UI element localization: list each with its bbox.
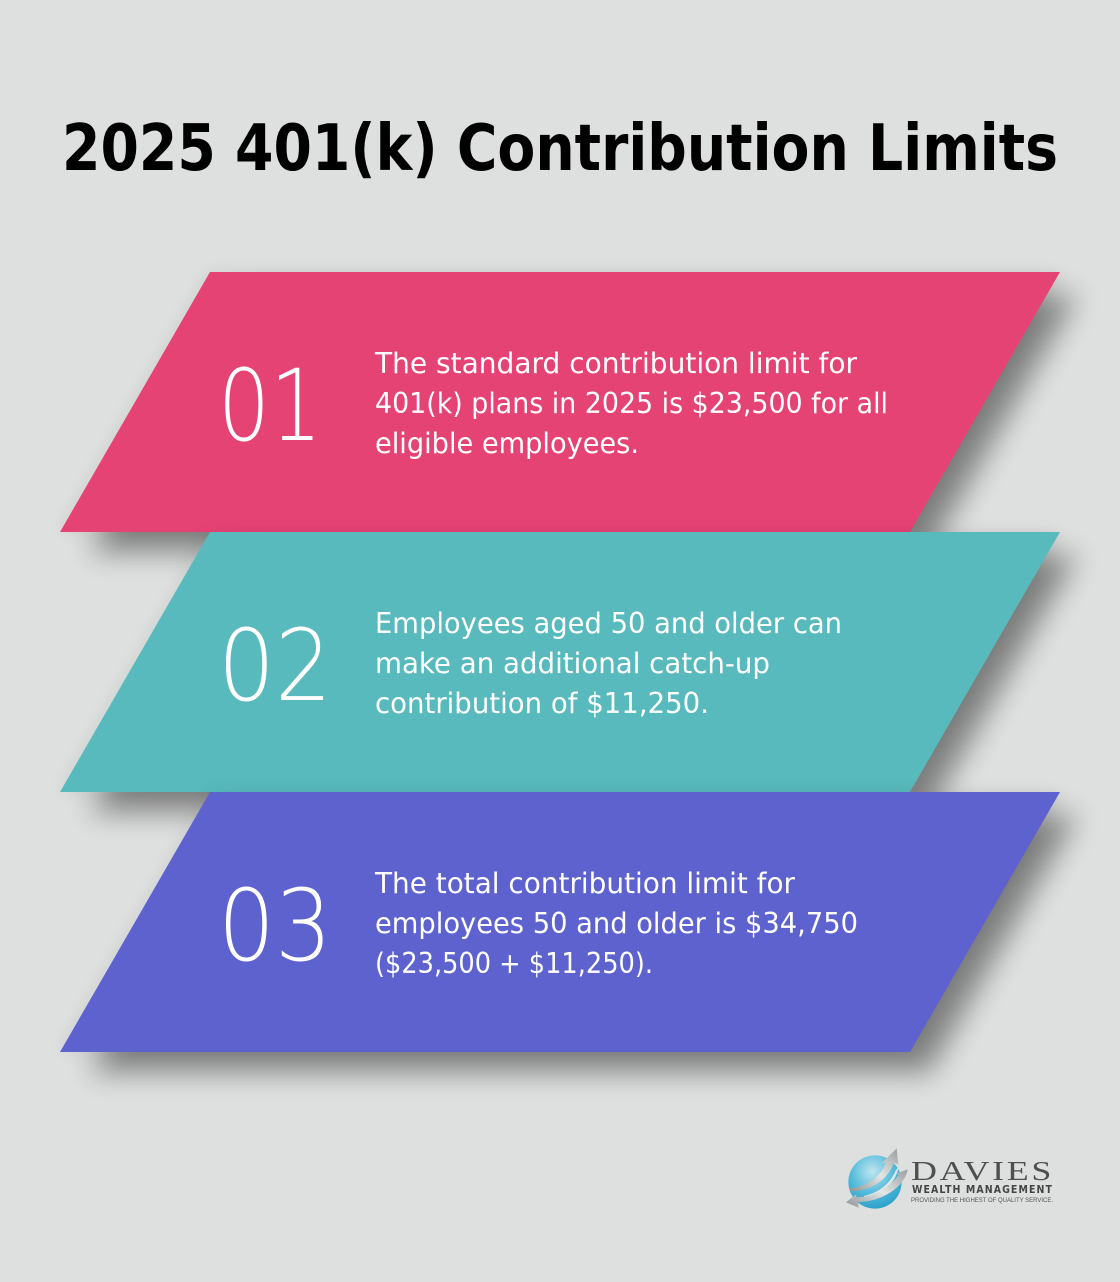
number 03: 03 xyxy=(218,869,332,984)
text: step 03 description: ($23,500 + $11,250). xyxy=(375,947,653,980)
text: step 01 description xyxy=(374,347,888,460)
text: step 03 description: employees 50 and older is $34,750 xyxy=(375,907,858,940)
text: step 03 description: The total contribution limit for xyxy=(374,867,795,900)
number 01: 01 xyxy=(218,349,322,464)
panel: step 03 shadow xyxy=(60,792,1077,1072)
logo tagline: PROVIDING THE HIGHEST OF QUALITY SERVICE. xyxy=(911,1197,1053,1204)
text: step 02 description: contribution of $11,250. xyxy=(375,687,709,720)
number 02: 02 xyxy=(218,609,332,724)
logo: Davies Wealth Management xyxy=(846,1148,1054,1209)
text: step 02 description xyxy=(375,607,842,720)
text: step 01 description: 401(k) plans in 2025 is $23,500 for all xyxy=(375,387,888,420)
panel: step 02 xyxy=(60,532,1060,792)
text: step 01 description: eligible employees. xyxy=(375,427,639,460)
logo subtitle: WEALTH MANAGEMENT xyxy=(912,1184,1053,1196)
text: step 01 description: The standard contribution limit for xyxy=(374,347,857,380)
logo wordmark: DAVIES xyxy=(911,1156,1054,1186)
panel: step 01 shadow xyxy=(60,272,1077,552)
panel: step 03 xyxy=(60,792,1060,1052)
panel: step 02 shadow xyxy=(60,532,1077,812)
text: step 02 description: Employees aged 50 and older can xyxy=(375,607,842,640)
panel: step 01 xyxy=(60,272,1060,532)
text: step 03 description xyxy=(374,867,858,980)
icon: globe with arrows xyxy=(846,1148,908,1209)
text: step 02 description: make an additional catch-up xyxy=(375,647,770,680)
